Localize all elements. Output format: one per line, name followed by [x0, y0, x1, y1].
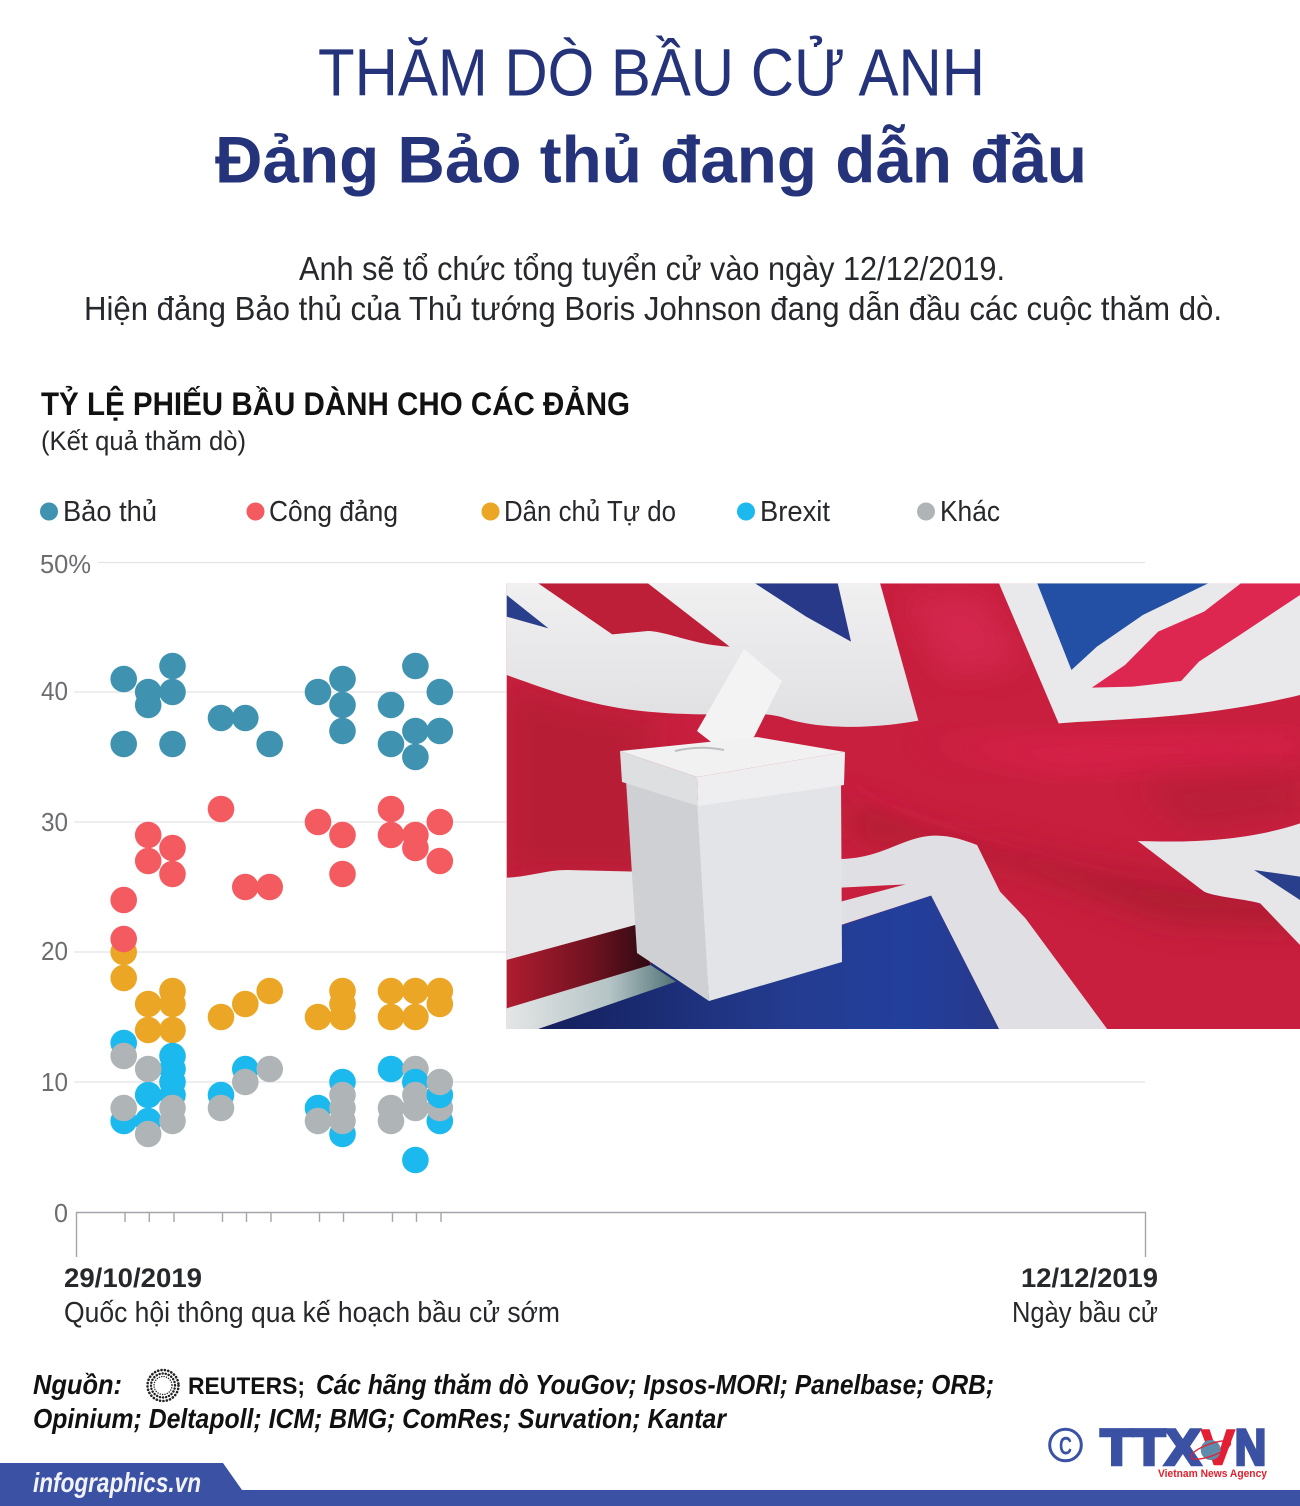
legend: Bảo thủ — [63, 496, 157, 528]
source: Opinium; Deltapoll; ICM; BMG; ComRes; Survation; Kantar — [33, 1403, 728, 1434]
y axis labels — [40, 549, 91, 1228]
start date label: 29/10/2019 — [64, 1263, 202, 1293]
intro text — [84, 250, 1222, 327]
icon: copyright — [1050, 1429, 1081, 1461]
footer band: infographics.vn — [33, 1467, 201, 1498]
dots: Công đảng — [110, 796, 453, 952]
dots: Dân chủ Tự do — [110, 939, 453, 1043]
y axis labels: 50% — [40, 549, 91, 579]
dots: Bảo thủ — [110, 653, 453, 770]
icon: copyright: C — [1059, 1432, 1072, 1460]
legend: Brexit — [760, 496, 830, 528]
y axis labels: 20 — [41, 936, 68, 966]
dot chart — [40, 549, 1146, 1257]
end date label: Ngày bầu cử — [1012, 1297, 1158, 1329]
dots: Brexit — [110, 1030, 453, 1173]
intro text: Hiện đảng Bảo thủ của Thủ tướng Boris Johnson đang dẫn đầu các cuộc thăm dò. — [84, 290, 1222, 327]
white bands top-right — [999, 583, 1300, 723]
end date label: 12/12/2019 — [1021, 1263, 1158, 1293]
logo: TTXVN — [1050, 1420, 1268, 1480]
logo: TTXVN: Vietnam News Agency — [1158, 1468, 1268, 1480]
chart heading: TỶ LỆ PHIẾU BẦU DÀNH CHO CÁC ĐẢNG — [41, 386, 630, 422]
icon: Reuters logo — [148, 1370, 178, 1401]
chart heading — [41, 386, 630, 456]
white bands bottom — [507, 870, 643, 960]
ballot paper — [697, 649, 782, 752]
icon: globe — [1189, 1437, 1232, 1463]
x axis — [76, 1212, 1146, 1257]
y axis labels: 40 — [41, 676, 68, 706]
ballot box — [620, 737, 845, 1001]
end date label — [1012, 1263, 1158, 1329]
title line 1: THĂM DÒ BẦU CỬ ANH — [318, 36, 985, 111]
start date label — [64, 1263, 560, 1329]
start date label: Quốc hội thông qua kế hoạch bầu cử sớm — [64, 1297, 560, 1329]
logo: TTXVN: TTX — [1100, 1420, 1200, 1476]
white bands top-left — [507, 583, 918, 727]
flag shading — [507, 595, 1300, 928]
source: Các hãng thăm dò YouGov; Ipsos-MORI; Panelbase; ORB; — [316, 1369, 994, 1400]
legend — [40, 496, 1000, 528]
legend: Khác — [940, 496, 1000, 528]
y axis labels: 30 — [41, 807, 68, 837]
source — [33, 1369, 994, 1434]
intro text: Anh sẽ tổ chức tổng tuyển cử vào ngày 12/12/2019. — [299, 250, 1005, 287]
legend: Dân chủ Tự do — [504, 496, 676, 528]
logo: TTXVN: N — [1235, 1420, 1266, 1476]
logo: TTXVN: V — [1201, 1420, 1236, 1476]
y axis labels: 10 — [41, 1067, 68, 1097]
y axis labels: 0 — [54, 1198, 68, 1228]
footer band — [0, 1463, 1300, 1506]
title line 2: Đảng Bảo thủ đang dẫn đầu — [215, 122, 1087, 196]
dots: Khác — [110, 1043, 429, 1147]
legend: Công đảng — [269, 496, 398, 528]
title — [215, 36, 1087, 196]
source: Nguồn: — [33, 1369, 122, 1400]
source: REUTERS; — [188, 1373, 305, 1400]
chart heading: (Kết quả thăm dò) — [41, 426, 246, 456]
image: UK flag with ballot box — [507, 583, 1300, 1029]
